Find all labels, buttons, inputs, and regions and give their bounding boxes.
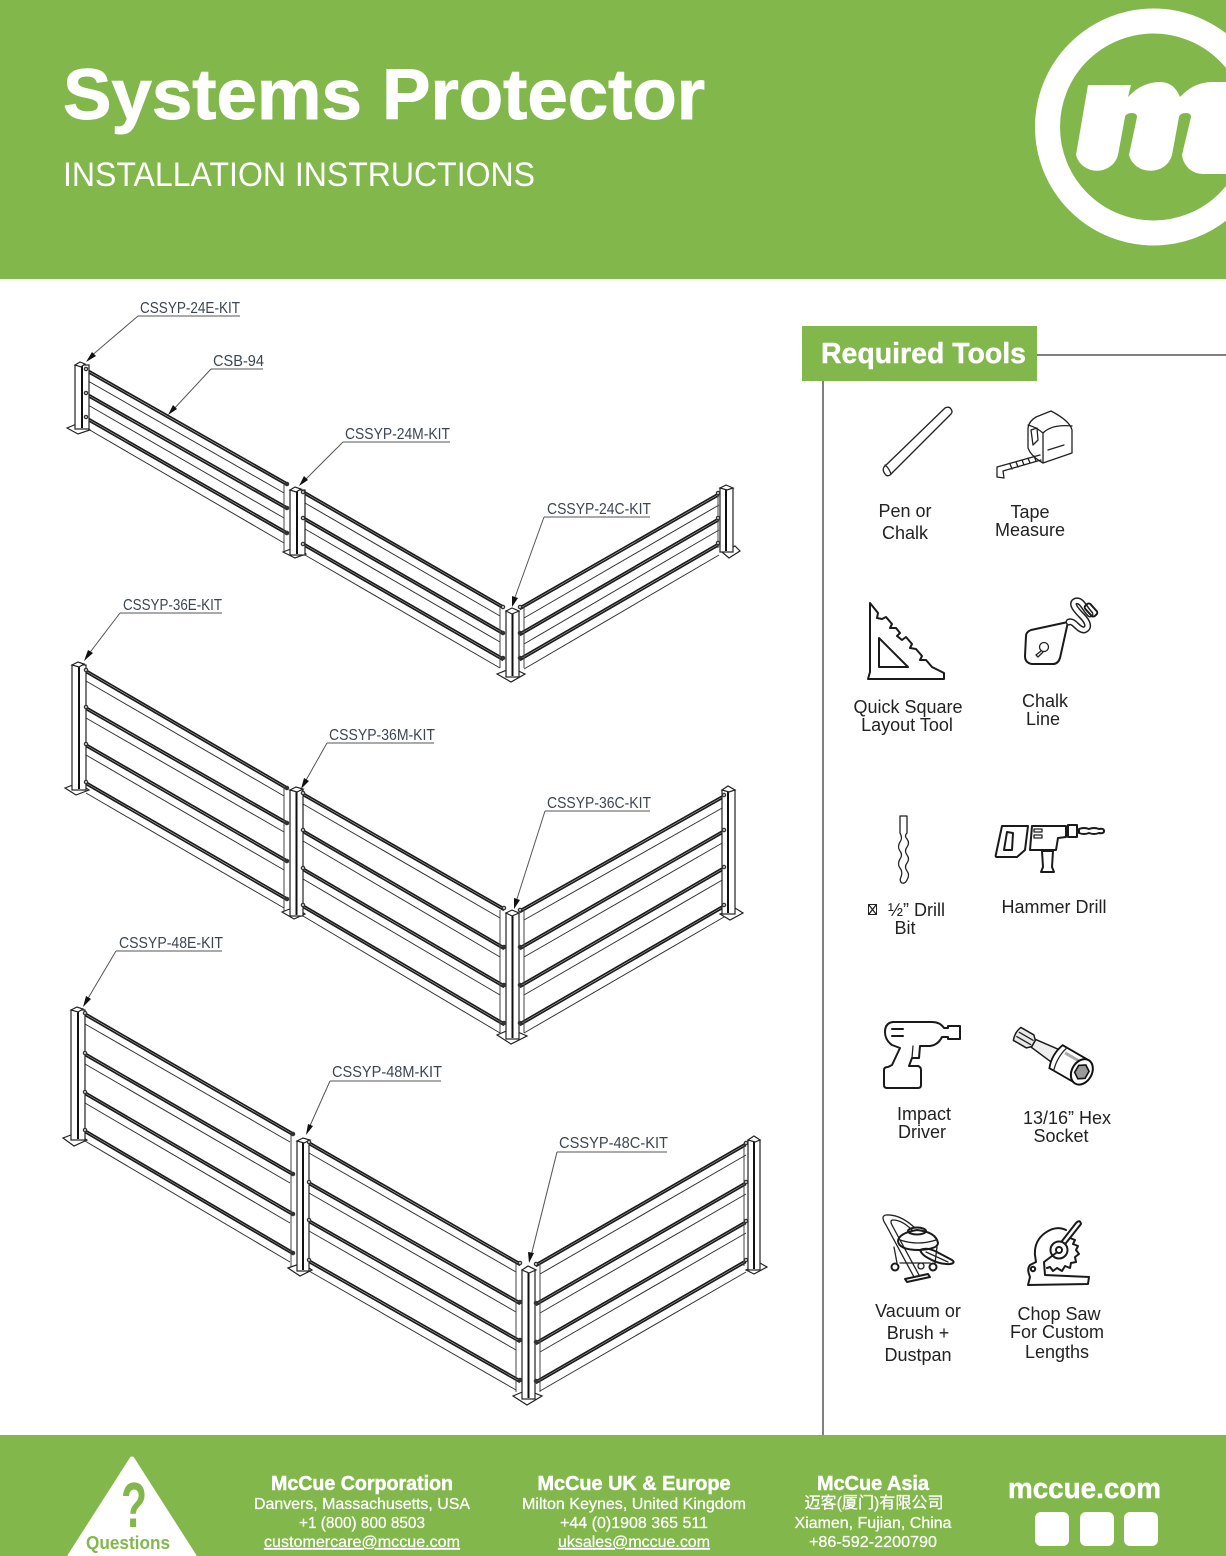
panel: required tools <box>802 326 1226 1435</box>
tool: drill bit <box>868 816 945 938</box>
tool: quick square: Layout Tool <box>861 715 953 735</box>
part label: CSSYP-48E-KIT <box>83 935 223 1007</box>
tool: vacuum: Vacuum or <box>875 1301 961 1321</box>
part label: CSSYP-48C-KIT: CSSYP-48C-KIT <box>559 1135 668 1152</box>
tool: chop saw <box>1010 1221 1104 1362</box>
tool: impact driver <box>884 1022 960 1142</box>
part label: CSSYP-36E-KIT <box>84 597 222 661</box>
tool: chalk line <box>1022 601 1098 729</box>
part label: CSSYP-24C-KIT <box>512 501 651 607</box>
tool: tape measure: Measure <box>995 520 1065 540</box>
tool: pen or chalk <box>878 407 952 543</box>
tool: tape measure: Tape <box>1010 502 1050 522</box>
end post <box>67 362 90 434</box>
contact: McCue UK and Europe: McCue UK & Europe <box>538 1473 730 1495</box>
fence diagram: 36 inch <box>65 662 743 1044</box>
middle post <box>288 1138 312 1276</box>
part label: CSB-94 <box>168 353 264 415</box>
contact: McCue Asia: +86-592-2200790 <box>809 1534 937 1551</box>
part label: CSSYP-24E-KIT <box>86 300 240 362</box>
tool: hammer drill: Hammer Drill <box>1002 897 1106 917</box>
corner post <box>497 910 527 1044</box>
tool: quick square <box>853 603 963 735</box>
corner post <box>497 608 525 682</box>
part label: CSSYP-48E-KIT: CSSYP-48E-KIT <box>119 935 223 952</box>
heading: required tools: Required Tools <box>821 338 1026 370</box>
icon: questions triangle <box>70 1459 194 1556</box>
part label: CSSYP-36E-KIT: CSSYP-36E-KIT <box>123 597 222 614</box>
tool: impact driver: Driver <box>898 1122 946 1142</box>
contact: McCue UK and Europe: uksales@mccue.com <box>558 1534 710 1551</box>
tool: quick square: Quick Square <box>853 697 963 717</box>
contact: McCue Corporation: McCue Corporation <box>271 1473 453 1495</box>
icon: questions triangle: ? <box>121 1469 147 1541</box>
part label: CSSYP-48C-KIT <box>528 1135 668 1263</box>
contact: McCue Asia: McCue Asia <box>817 1473 930 1495</box>
part label: CSSYP-24E-KIT: CSSYP-24E-KIT <box>140 300 240 317</box>
part label: CSSYP-24M-KIT <box>299 426 450 486</box>
subtitle: INSTALLATION INSTRUCTIONS <box>63 156 535 194</box>
end post right <box>746 1136 767 1274</box>
middle post <box>283 487 306 558</box>
icon: questions triangle: Questions <box>86 1533 170 1553</box>
tool: chop saw: Chop Saw <box>1017 1304 1102 1324</box>
tool: chop saw: For Custom <box>1010 1322 1104 1342</box>
part label: CSSYP-36C-KIT: CSSYP-36C-KIT <box>547 795 651 812</box>
contact: McCue Asia: 迈客(厦门)有限公司 <box>804 1494 944 1512</box>
part label: CSSYP-36M-KIT <box>301 727 435 789</box>
tool: hex socket <box>1009 1022 1097 1089</box>
title: Systems Protector <box>63 56 705 135</box>
part label: CSSYP-24C-KIT: CSSYP-24C-KIT <box>547 501 651 518</box>
fence diagram: 48 inch <box>63 1007 767 1405</box>
contact: McCue UK and Europe <box>522 1473 746 1551</box>
tool: hammer drill <box>996 825 1106 917</box>
tool: tape measure <box>995 411 1072 540</box>
corner post <box>513 1266 542 1405</box>
tool: vacuum: Brush + <box>887 1323 949 1343</box>
fence diagram: 24 inch <box>67 362 740 682</box>
end post right <box>720 786 743 920</box>
end post right <box>720 485 740 558</box>
contact: McCue Corporation: customercare@mccue.com <box>264 1534 460 1551</box>
website and social icons: mccue.com <box>1008 1473 1161 1505</box>
footer band <box>0 1435 1226 1556</box>
tool: pen or chalk: Chalk <box>882 523 929 543</box>
label: hex socket: Socket <box>1033 1126 1089 1146</box>
end post <box>63 1007 87 1146</box>
part label: CSSYP-48M-KIT: CSSYP-48M-KIT <box>332 1064 442 1081</box>
tool: vacuum: Dustpan <box>884 1345 952 1365</box>
contact: McCue Corporation: +1 (800) 800 8503 <box>299 1515 425 1532</box>
contact: McCue UK and Europe: Milton Keynes, United Kingdom <box>522 1496 746 1513</box>
header banner <box>0 0 1226 279</box>
contact: McCue UK and Europe: +44 (0)1908 365 511 <box>560 1515 708 1532</box>
tool: pen or chalk: Pen or <box>878 501 932 521</box>
part label: CSSYP-36M-KIT: CSSYP-36M-KIT <box>329 727 435 744</box>
tool: drill bit: Bit <box>894 918 916 938</box>
contact: McCue Asia <box>794 1473 952 1551</box>
contact: McCue Asia: Xiamen, Fujian, China <box>794 1515 952 1532</box>
tool: chalk line: Chalk <box>1022 691 1069 711</box>
heading: required tools <box>802 326 1037 381</box>
part label: CSSYP-36C-KIT <box>514 795 651 909</box>
contact: McCue Corporation <box>254 1473 470 1551</box>
tool: drill bit: ½” Drill <box>888 900 945 920</box>
part label: CSSYP-24M-KIT: CSSYP-24M-KIT <box>345 426 450 443</box>
label: hex socket <box>1023 1108 1111 1146</box>
middle post <box>282 787 305 919</box>
label: hex socket: 13/16” Hex <box>1023 1108 1111 1128</box>
tool: impact driver: Impact <box>897 1104 951 1124</box>
part label: CSSYP-48M-KIT <box>306 1064 442 1135</box>
icon: McCue logo <box>1048 21 1226 233</box>
tool: chop saw: Lengths <box>1025 1342 1089 1362</box>
tool: vacuum <box>875 1215 961 1365</box>
end post <box>65 662 89 795</box>
website and social icons <box>1008 1473 1161 1546</box>
tool: chalk line: Line <box>1026 709 1060 729</box>
contact: McCue Corporation: Danvers, Massachusetts, USA <box>254 1496 470 1513</box>
part label: CSB-94: CSB-94 <box>213 353 264 370</box>
